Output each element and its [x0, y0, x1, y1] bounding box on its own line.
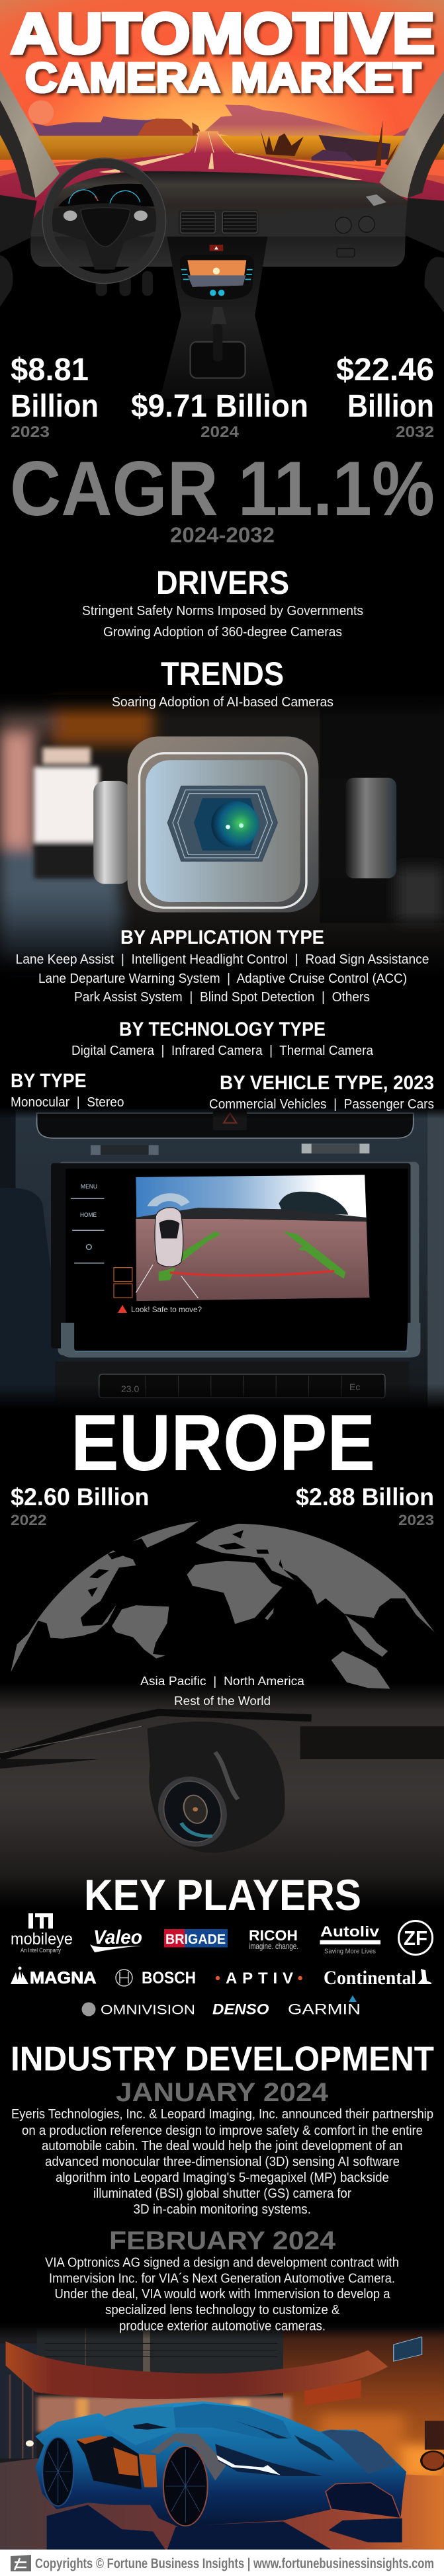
logo: Magna: MAGNA [30, 1969, 97, 1987]
far road [189, 131, 236, 153]
hazard button [210, 245, 223, 251]
logo: Autoliv: Saving More Lives [324, 1948, 376, 1955]
February 2024 development: Immervision Inc. for VIA´s Next Generation Automotive Camera. [49, 2271, 395, 2286]
dashboard top [31, 171, 408, 238]
trends [112, 655, 333, 710]
segment: by vehicle type [209, 1072, 434, 1112]
stat: 2024 market size: $9.71 Billion [131, 389, 308, 424]
instrument gauges [58, 184, 157, 206]
trends: TRENDS [161, 655, 284, 692]
other regions [140, 1675, 305, 1708]
Europe 2022 value: 2022 [11, 1512, 46, 1528]
left wall [0, 2343, 37, 2458]
street backdrop [0, 2323, 444, 2550]
camera photo [0, 694, 444, 976]
upper vents [37, 1110, 414, 1138]
Europe 2022 value: $2.60 Billion [11, 1483, 150, 1511]
dash knobs [335, 216, 375, 257]
stat: 2023 market size [11, 353, 99, 441]
title [11, 2, 435, 101]
car body [35, 2401, 406, 2528]
South America [112, 1605, 169, 1659]
door panels [0, 195, 444, 313]
sports car [35, 2401, 406, 2528]
right A-pillar [379, 70, 444, 198]
climate control panel [55, 1362, 409, 1402]
screen labels [80, 1183, 202, 1314]
centre console [160, 237, 276, 399]
segment: by type: BY TYPE [11, 1070, 86, 1092]
road shoulders [0, 151, 444, 184]
side intake [77, 2436, 142, 2489]
other regions: Asia Pacific | North America [140, 1675, 305, 1688]
logo: Ricoh [249, 1927, 298, 1951]
segment: by technology type: Digital Camera | Infrared Camera | Thermal Camera [71, 1044, 374, 1058]
trim switches [91, 1143, 369, 1155]
roof panel [105, 2407, 176, 2445]
January 2024 development: on a production reference design to improve safety & comfort in the entire [22, 2124, 423, 2138]
footer band [0, 2550, 444, 2576]
left A-pillar [0, 70, 60, 198]
lens hood rings [167, 786, 277, 861]
left pillar dark band [0, 101, 35, 198]
screen labels: HOME [80, 1212, 97, 1218]
left field [0, 136, 204, 160]
camera face [146, 760, 300, 902]
hero car photo [0, 2323, 444, 2550]
hazy moon [28, 101, 54, 124]
February 2024 development [45, 2227, 399, 2333]
February 2024 development: FEBRUARY 2024 [109, 2227, 335, 2255]
logo: Omnivision: OMNIVISION [101, 2003, 195, 2017]
near road [0, 153, 444, 223]
logo: Autoliv [320, 1923, 380, 1955]
logo: Denso: DENSO [212, 2001, 269, 2017]
top fade [0, 2323, 444, 2339]
right wall [283, 2330, 444, 2478]
camera body [128, 737, 318, 913]
nose panel [322, 2430, 396, 2474]
panel fade [0, 1384, 444, 1409]
logo: Ricoh: imagine. change. [249, 1941, 298, 1951]
trends: Soaring Adoption of AI-based Cameras [112, 695, 333, 710]
hero interior: car dashboard [0, 70, 444, 399]
screen bezel [58, 1162, 419, 1355]
screen controls [71, 1198, 132, 1298]
January 2024 development: 3D in-cabin monitoring systems. [134, 2202, 311, 2217]
infotainment screen [180, 255, 254, 300]
title: CAMERA MARKET [25, 55, 421, 101]
left mountains [32, 116, 154, 136]
logo: Valeo: Valeo [93, 1927, 142, 1948]
drivers [82, 564, 363, 640]
gear shifter [191, 307, 245, 378]
segment: by application type: Park Assist System | Blind Spot Detection | Others [74, 990, 370, 1005]
segment: by application type: Lane Departure Warning System | Adaptive Cruise Control (ACC) [38, 972, 407, 986]
other regions: Rest of the World [174, 1694, 271, 1708]
segment: by application type [16, 927, 429, 1005]
Madagascar [265, 1608, 274, 1620]
key players heading: KEY PLAYERS [84, 1870, 361, 1919]
industry development heading: INDUSTRY DEVELOPMENT [11, 2040, 434, 2078]
Europe 2023 value: 2023 [398, 1512, 434, 1528]
Greenland [133, 1521, 199, 1548]
cart wheel [422, 2421, 444, 2470]
screen lower frame [61, 1323, 420, 1358]
segment: by application type: Lane Keep Assist | Intelligent Headlight Control | Road Sign Assistance [16, 952, 429, 967]
stat: 2032 market size: Billion [347, 389, 434, 424]
blurred background [0, 694, 444, 976]
screen [66, 1169, 408, 1347]
logo: Brigade: BRIGADE [165, 1932, 226, 1947]
title: AUTOMOTIVE [11, 2, 435, 65]
logo: Autoliv: Autoliv [320, 1923, 380, 1940]
hood vents [235, 2421, 334, 2461]
top fade [0, 1108, 444, 1118]
air vents [179, 210, 259, 235]
upper buildings [37, 2328, 283, 2374]
drivers: DRIVERS [156, 564, 289, 601]
February 2024 development: VIA Optronics AG signed a design and development contract with [45, 2255, 399, 2270]
stat: 2024 market size: 2024 [200, 423, 240, 441]
red awning [6, 2341, 388, 2399]
headlight housing [215, 2444, 323, 2476]
logo: Bosch [116, 1969, 196, 1987]
January 2024 development: JANUARY 2024 [116, 2078, 329, 2107]
logo: Mobileye [11, 1913, 73, 1954]
logo: ZF [398, 1921, 433, 1955]
January 2024 development [11, 2078, 433, 2217]
logo: Garmin [288, 1995, 361, 2017]
logo: Magna [11, 1967, 97, 1987]
drivers: Stringent Safety Norms Imposed by Governments [82, 604, 363, 618]
landscape: mountains, fields and road [0, 101, 444, 223]
February 2024 development: Under the deal, VIA would work with Immervision to develop a [54, 2287, 390, 2302]
pedals and stalks [96, 271, 153, 296]
climate labels [121, 1382, 360, 1394]
glove box vent [366, 194, 386, 206]
neon sign [304, 2380, 361, 2405]
January 2024 development: algorithm into Leopard Imaging's 5-megapixel (MP) backside [56, 2171, 389, 2185]
CAGR: 2024-2032 [170, 523, 275, 547]
screen labels: MENU [81, 1183, 97, 1190]
climate labels: 23.0 [121, 1384, 139, 1394]
camera view [136, 1175, 369, 1301]
January 2024 development: advanced monocular three-dimensional (3D) sensing AI software [45, 2155, 400, 2169]
logo: Ricoh: RICOH [249, 1927, 298, 1944]
right field [221, 136, 444, 160]
tall grass [375, 120, 383, 166]
logo: ZF: ZF [404, 1927, 427, 1950]
dashboard reverse camera photo [0, 1108, 444, 1409]
red rock [138, 118, 199, 136]
sunset sky [0, 0, 444, 212]
drivers: Growing Adoption of 360-degree Cameras [103, 625, 342, 640]
wheel arch [150, 2433, 226, 2481]
logo: Aptiv: APTIV [226, 1970, 293, 1987]
right lens barrel [320, 778, 396, 878]
bottom bezel [74, 1323, 408, 1350]
logo: Mobileye: An Intel Company [21, 1947, 61, 1954]
stat: 2032 market size: $22.46 [336, 353, 434, 388]
stat: 2023 market size: Billion [11, 389, 99, 424]
front grille [326, 2483, 400, 2518]
windshield [173, 2403, 292, 2438]
right pillar dark band [408, 113, 444, 198]
screen labels: Look! Safe to move? [131, 1305, 202, 1314]
road markings [99, 132, 363, 180]
February 2024 development: produce exterior automotive cameras. [119, 2319, 326, 2333]
North America [11, 1550, 136, 1672]
camera white ring [140, 753, 306, 907]
far peak [392, 128, 409, 136]
roof scoop [133, 2423, 167, 2430]
February 2024 development: specialized lens technology to customize & [105, 2303, 340, 2317]
climate labels: Ec [349, 1382, 360, 1392]
right mountain [204, 104, 375, 136]
logo: Bosch: BOSCH [142, 1969, 196, 1987]
car wheels [42, 2438, 208, 2526]
stat: 2032 market size [336, 353, 434, 441]
wet street [0, 2458, 444, 2550]
segment: by type [11, 1070, 124, 1110]
blue shop sign [394, 2337, 422, 2361]
backstreet glow [37, 2397, 292, 2432]
dashboard background [0, 1109, 444, 1409]
LED strip [216, 2455, 281, 2475]
Africa [187, 1561, 283, 1624]
January 2024 development: illuminated (BSI) global shutter (GS) camera for [93, 2186, 351, 2201]
orange panels [77, 2435, 157, 2487]
bottom fade [0, 912, 444, 976]
segment: by vehicle type: Commercial Vehicles | Passenger Cars [209, 1097, 434, 1112]
January 2024 development: automobile cabin. The deal would help the joint development of an [42, 2139, 402, 2153]
inland seas [218, 1530, 283, 1569]
Eurasia [195, 1524, 435, 1632]
street lamp [26, 2440, 34, 2446]
dark rocks [312, 135, 391, 161]
region heading: EUROPE [71, 1397, 375, 1487]
bottom rear camera photo [0, 1683, 444, 1908]
segment: by technology type [71, 1018, 374, 1058]
Europe 2023 value: $2.88 Billion [296, 1483, 434, 1511]
Southeast Asia islands [345, 1615, 388, 1657]
lower dashboard [30, 235, 406, 267]
logo: Omnivision [82, 2003, 195, 2017]
top fade [0, 694, 444, 720]
lens [194, 798, 259, 851]
logo: Mobileye: mobileye [11, 1930, 73, 1948]
logo: Garmin: GARMIN [288, 2001, 361, 2017]
left lens barrel [93, 781, 130, 884]
stat: 2032 market size: 2032 [396, 423, 434, 441]
footer logo [11, 2555, 31, 2571]
dash mid band [30, 204, 406, 237]
segment: by technology type: BY TECHNOLOGY TYPE [119, 1018, 326, 1040]
Europe 2023 value [296, 1483, 434, 1528]
side shadows [0, 1109, 444, 1409]
stat: 2023 market size: 2023 [11, 423, 50, 441]
stat: 2024 market size [131, 389, 308, 441]
stat: 2023 market size: $8.81 [11, 353, 89, 388]
segment: by type: Monocular | Stereo [11, 1095, 124, 1110]
Australia [332, 1651, 390, 1688]
logo: Continental: Continental [324, 1967, 416, 1989]
Hudson Bay and lakes [88, 1551, 124, 1597]
lower dash and climate panel [0, 1323, 444, 1409]
world map [11, 1521, 435, 1688]
fire glow [320, 2414, 444, 2478]
Europe 2022 value [11, 1483, 150, 1528]
segment: by application type: BY APPLICATION TYPE [120, 927, 324, 948]
steering wheel [42, 158, 166, 283]
ground reflection [47, 2505, 402, 2550]
shrubs [261, 130, 304, 156]
